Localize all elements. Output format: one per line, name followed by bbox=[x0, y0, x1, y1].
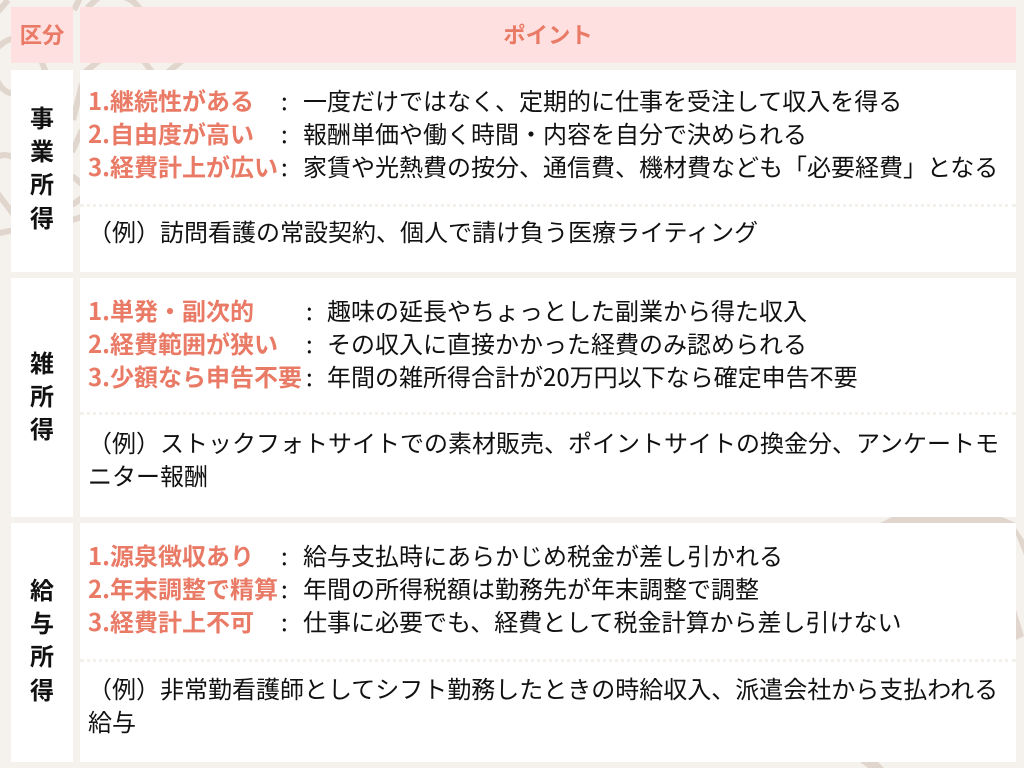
header: ポイント bbox=[80, 7, 1016, 63]
points: 給与所得: : bbox=[281, 570, 288, 605]
points: 事業所得: 1.継続性がある bbox=[88, 82, 254, 117]
points: 給与所得: 2.年末調整で精算 bbox=[88, 570, 278, 605]
points: 事業所得: 一度だけではなく、定期的に仕事を受注して収入を得る bbox=[303, 82, 902, 117]
category: 雑所得: 雑 bbox=[30, 344, 54, 379]
points: 事業所得: : bbox=[281, 82, 288, 117]
category: 給与所得: 与 bbox=[30, 604, 54, 639]
example: 事業所得: （例）訪問看護の常設契約、個人で請け負う医療ライティング bbox=[88, 213, 758, 248]
points: 雑所得: その収入に直接かかった経費のみ認められる bbox=[327, 325, 807, 360]
points: 雑所得: 年間の雑所得合計が20万円以下なら確定申告不要 bbox=[327, 358, 858, 393]
panel: 給与所得 points bbox=[80, 523, 1016, 762]
category: 給与所得: 所 bbox=[30, 637, 54, 672]
category: 雑所得 bbox=[11, 278, 73, 517]
points: 雑所得: 2.経費範囲が狭い bbox=[88, 325, 278, 360]
points: 給与所得: 年間の所得税額は勤務先が年末調整で調整 bbox=[303, 570, 759, 605]
category: 雑所得: 所 bbox=[30, 377, 54, 412]
category: 事業所得: 業 bbox=[30, 132, 54, 167]
example: 給与所得: （例）非常勤看護師としてシフト勤務したときの時給収入、派遣会社から支払われる bbox=[88, 670, 998, 705]
category: 事業所得: 事 bbox=[30, 99, 54, 134]
example: 給与所得 bbox=[88, 670, 998, 738]
example: 雑所得 bbox=[88, 424, 999, 492]
points: 雑所得: 趣味の延長やちょっとした副業から得た収入 bbox=[327, 292, 807, 327]
points: 雑所得: 3.少額なら申告不要 bbox=[88, 358, 302, 393]
points: 雑所得: : bbox=[306, 358, 313, 393]
header: ポイント: ポイント bbox=[503, 18, 593, 50]
points: 事業所得: 3.経費計上が広い bbox=[88, 148, 278, 183]
example: 給与所得: 給与 bbox=[88, 703, 136, 738]
points: 給与所得: : bbox=[281, 603, 288, 638]
points: 事業所得 bbox=[88, 82, 998, 183]
category: 雑所得: 得 bbox=[30, 410, 54, 445]
points: 雑所得: 1.単発・副次的 bbox=[88, 292, 254, 327]
points: 事業所得: : bbox=[281, 115, 288, 150]
points: 給与所得 bbox=[88, 537, 902, 638]
category: 事業所得 bbox=[11, 70, 73, 272]
points: 給与所得: : bbox=[281, 537, 288, 572]
points: 給与所得: 給与支払時にあらかじめ税金が差し引かれる bbox=[303, 537, 783, 572]
panel: 事業所得 points bbox=[80, 70, 1016, 272]
points: 雑所得 bbox=[88, 292, 858, 393]
points: 事業所得: 報酬単価や働く時間・内容を自分で決められる bbox=[303, 115, 807, 150]
category: 事業所得: 所 bbox=[30, 165, 54, 200]
example: 雑所得: （例）ストックフォトサイトでの素材販売、ポイントサイトの換金分、アンケートモ bbox=[88, 424, 999, 459]
points: 雑所得: : bbox=[306, 325, 313, 360]
points: 給与所得: 1.源泉徴収あり bbox=[88, 537, 254, 572]
points: 雑所得: : bbox=[306, 292, 313, 327]
category: 給与所得 bbox=[11, 523, 73, 762]
category: 給与所得: 給 bbox=[30, 571, 54, 606]
category: 事業所得: 得 bbox=[30, 199, 54, 234]
panel: 雑所得 points bbox=[80, 278, 1016, 517]
header: 区分 bbox=[11, 7, 73, 63]
points: 給与所得: 仕事に必要でも、経費として税金計算から差し引けない bbox=[303, 603, 902, 638]
points: 事業所得: : bbox=[281, 148, 288, 183]
points: 事業所得: 家賃や光熱費の按分、通信費、機材費なども「必要経費」となる bbox=[303, 148, 998, 183]
points: 給与所得: 3.経費計上不可 bbox=[88, 603, 254, 638]
header: 区分: 区分 bbox=[20, 18, 64, 50]
example: 雑所得: ニター報酬 bbox=[88, 457, 208, 492]
points: 事業所得: 2.自由度が高い bbox=[88, 115, 254, 150]
category: 給与所得: 得 bbox=[30, 671, 54, 706]
